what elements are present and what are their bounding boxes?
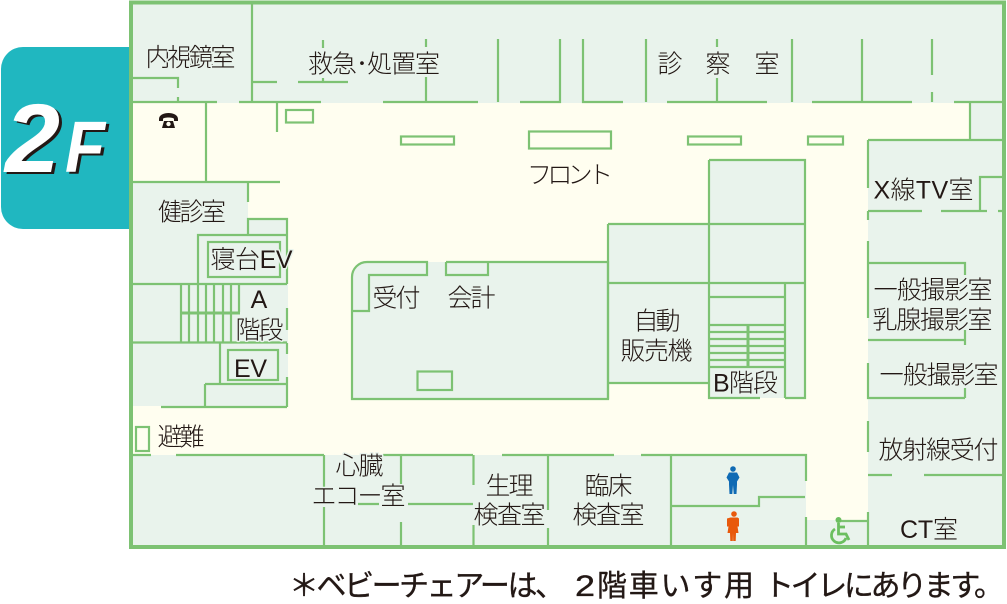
floor plan background	[131, 2, 1004, 547]
label: evacuation: 避難	[158, 424, 204, 452]
label: x-ray TV room: X線TV室	[874, 176, 974, 204]
label: emergency and treatment room: 救急･処置室	[308, 50, 440, 78]
label: stairs A line 2: 階段	[236, 316, 284, 344]
label: stairs A: A	[251, 286, 268, 314]
label: mammography room: 乳腺撮影室	[872, 306, 992, 334]
footnote: ＊ベビーチェアーは、	[289, 570, 565, 603]
label: reception: 受付	[372, 284, 420, 312]
walls	[133, 4, 1002, 545]
label: clinical lab line 2: 検査室	[572, 502, 644, 530]
label: health checkup room: 健診室	[158, 198, 226, 226]
label: physiology line 1: 生理	[486, 472, 534, 500]
counters and fixtures	[136, 110, 843, 451]
footnote: トイレにあります。	[764, 570, 1004, 603]
footnote: 階車いす用	[597, 570, 754, 603]
icon: women's restroom	[727, 511, 739, 541]
label: consultation room: 診察室	[658, 50, 780, 78]
floor badge: 2F: F	[68, 110, 110, 190]
label: general radiography room: 一般撮影室	[874, 276, 992, 304]
outer wall	[131, 2, 1004, 547]
footnote	[289, 570, 1004, 603]
label: cashier: 会計	[448, 284, 496, 312]
room labels	[146, 44, 998, 544]
floor badge: 2F	[1, 47, 151, 229]
label: radiology reception: 放射線受付	[878, 436, 998, 464]
icon: telephone	[159, 113, 178, 128]
label: vending machines line 2: 販売機	[620, 338, 692, 366]
icon: men's restroom	[726, 466, 740, 494]
footnote: 2	[575, 570, 595, 603]
corridor	[133, 103, 970, 520]
floor badge: 2F: F	[65, 108, 107, 188]
floor badge: 2F: 2	[3, 84, 60, 193]
label: general radiography room 2: 一般撮影室	[880, 362, 998, 390]
icon: wheelchair accessible	[831, 517, 849, 543]
label: CT room: CT室	[900, 516, 958, 544]
label: cardiac echo line 2: エコー室	[312, 482, 406, 510]
label: vending machines line 1: 自動	[634, 308, 680, 336]
label: endoscopy room: 内視鏡室	[146, 44, 236, 72]
label: front desk: フロント	[527, 162, 613, 190]
label: physiology line 2: 検査室	[474, 502, 546, 530]
central block fill	[352, 160, 805, 399]
label: bed elevator: 寝台EV	[210, 246, 293, 274]
label: clinical lab line 1: 臨床	[584, 472, 632, 500]
floor badge: 2F: 2	[6, 86, 63, 195]
label: elevator: EV	[234, 355, 267, 383]
label: stairs B: B階段	[713, 370, 778, 398]
label: cardiac echo line 1: 心臓	[336, 452, 384, 480]
